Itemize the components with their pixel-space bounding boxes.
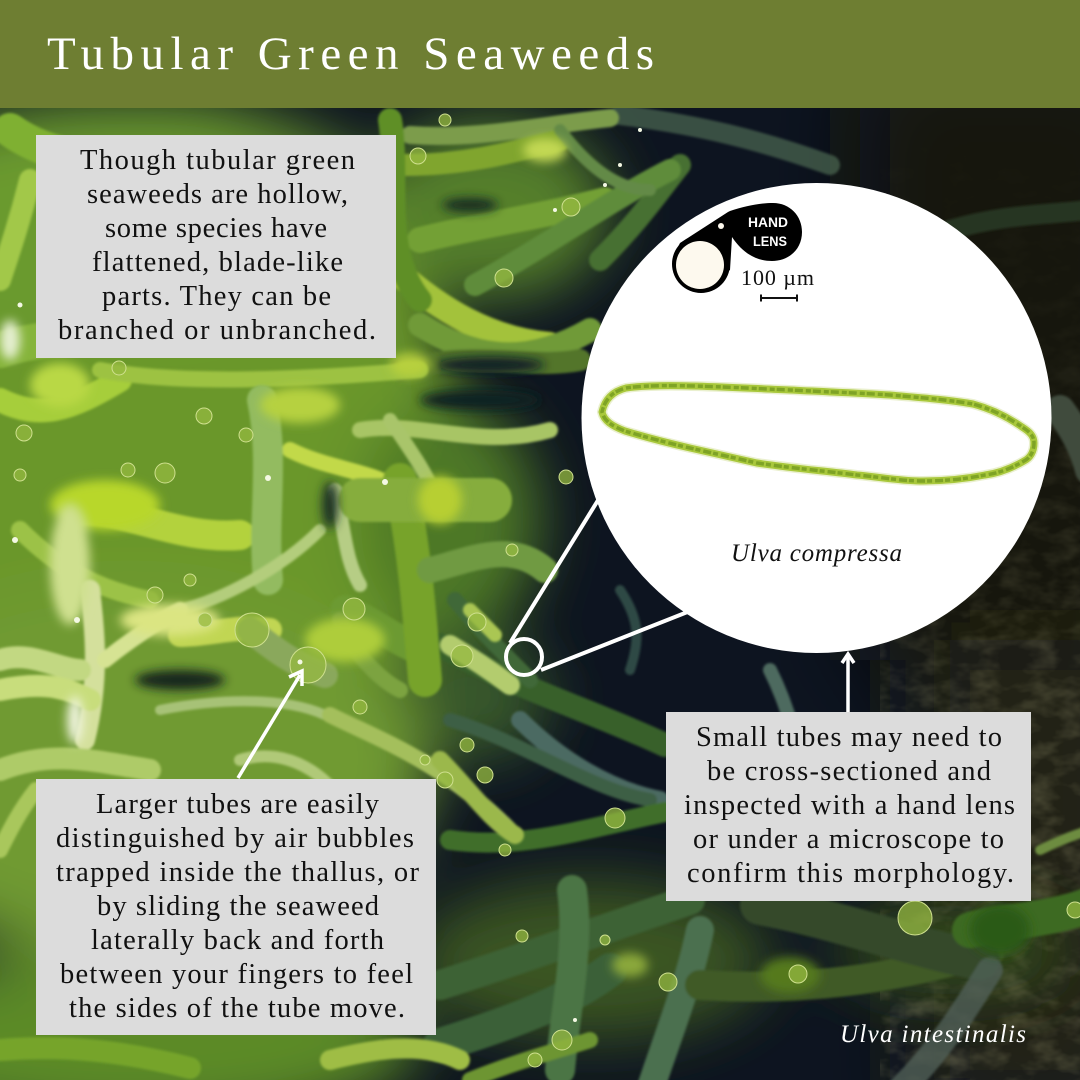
text panel: hollow tubes: parts. They can be	[102, 281, 331, 312]
text panel: larger tubes: laterally back and forth	[91, 925, 384, 956]
text panel: small tubes: or under a microscope to	[693, 824, 1004, 855]
bright tubes, left and centre	[360, 428, 550, 437]
text panel: hollow tubes: some species have	[105, 213, 327, 244]
micrograph: Ulva compressa tube cross-section	[602, 386, 1034, 481]
text panel: larger tubes: trapped inside the thallus, or	[56, 857, 420, 888]
header band	[0, 0, 1080, 108]
arrow: up to microscope circle	[842, 654, 854, 712]
icon: hand lens	[672, 203, 802, 293]
text panel: hollow tubes	[36, 135, 396, 358]
icon: hand lens: HAND	[748, 215, 788, 230]
text panel: small tubes: be cross-sectioned and	[707, 756, 991, 787]
text panel: larger tubes: the sides of the tube move.	[69, 993, 405, 1024]
text panel: larger tubes: distinguished by air bubbles	[56, 823, 414, 854]
text panel: small tubes: Small tubes may need to	[696, 722, 1002, 753]
species label: Ulva intestinalis: Ulva intestinalis	[840, 1021, 1026, 1048]
text panel: larger tubes: Larger tubes are easily	[96, 789, 380, 820]
scale bar: 100 µm	[741, 265, 814, 302]
species label: Ulva compressa: Ulva compressa	[731, 540, 902, 567]
panel: microscope view circle	[582, 183, 1052, 653]
text panel: larger tubes: by sliding the seaweed	[97, 891, 379, 922]
sunlit highlights and dark gaps	[50, 480, 160, 530]
translucent green blades, upper area	[410, 118, 610, 136]
dull strands, right side	[620, 115, 830, 165]
arrow: to large tube	[238, 671, 302, 778]
title: Tubular Green Seaweeds	[47, 28, 654, 80]
text panel: hollow tubes: branched or unbranched.	[58, 315, 376, 346]
text panel: small tubes: inspected with a hand lens	[684, 790, 1015, 821]
text panel: hollow tubes: flattened, blade-like	[92, 247, 343, 278]
scale bar: 100 µm: 100 µm	[741, 265, 814, 290]
text panel: small tubes: confirm this morphology.	[687, 858, 1014, 889]
icon: hand lens: LENS	[753, 234, 787, 249]
text panel: larger tubes: between your fingers to feel	[60, 959, 413, 990]
text panel: small tubes	[666, 712, 1031, 901]
text panel: hollow tubes: Though tubular green	[80, 145, 355, 176]
text panel: hollow tubes: seaweeds are hollow,	[87, 179, 348, 210]
text panel: larger tubes	[36, 779, 436, 1035]
magnifier callout ring and connector lines	[506, 497, 690, 675]
